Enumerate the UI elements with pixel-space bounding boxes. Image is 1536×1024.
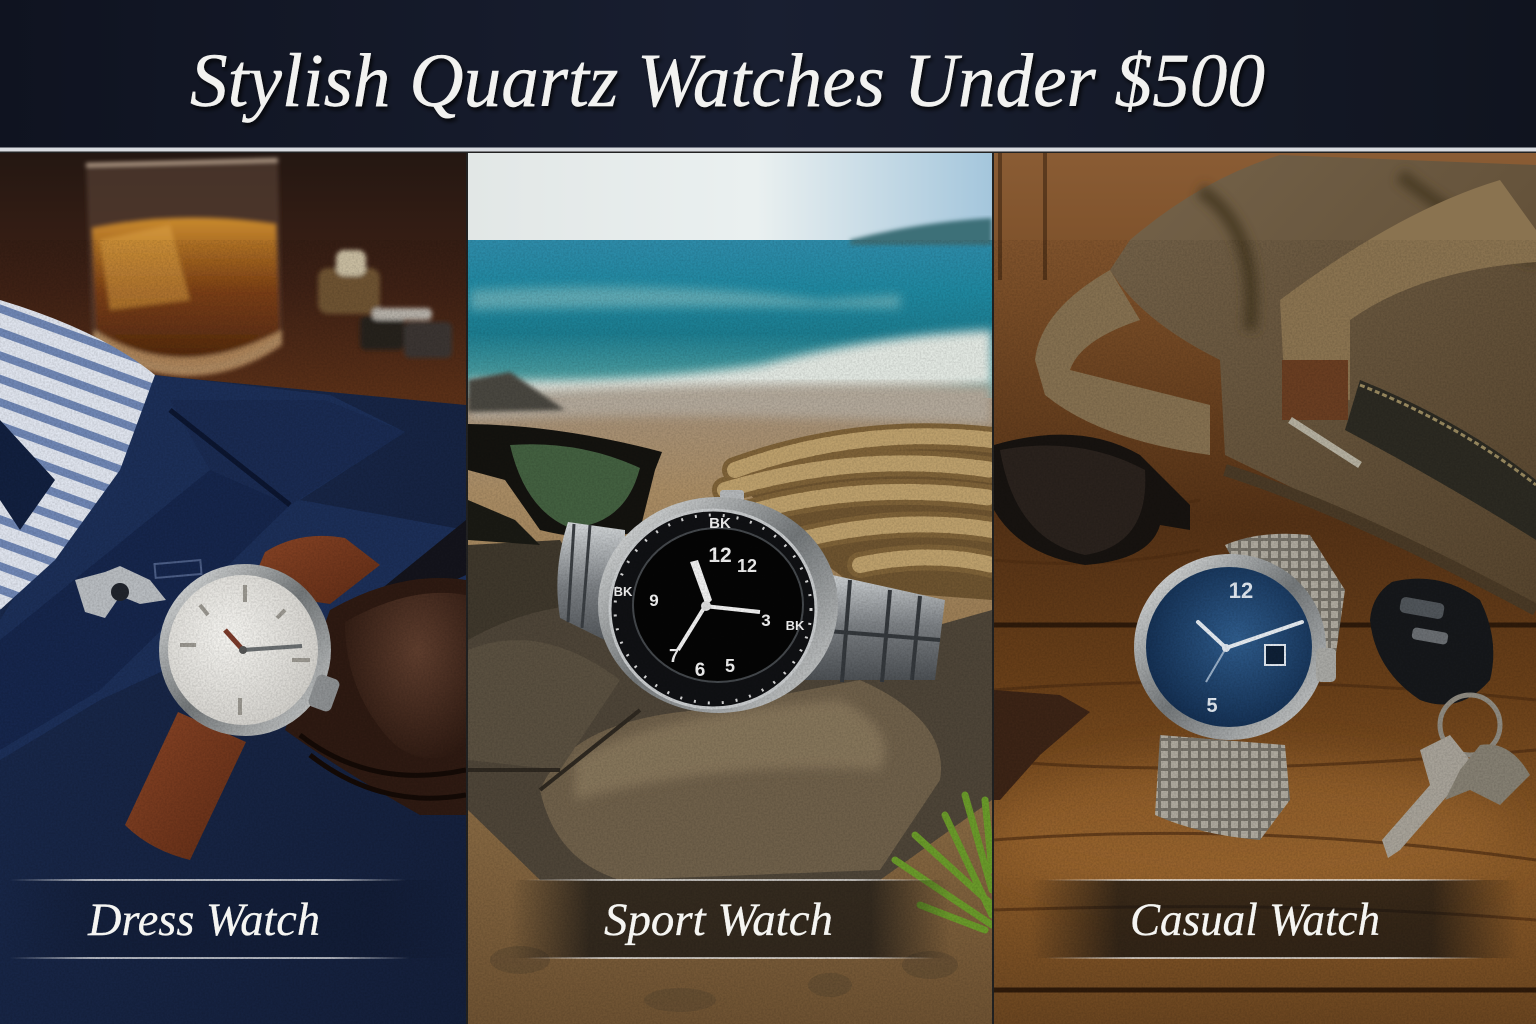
dial numerals: 12 [737,556,757,576]
striped shirt collar [0,300,155,610]
dial numerals: 6 [695,660,705,681]
band: sport [510,880,950,958]
dial numerals: 3 [761,611,771,630]
dial numerals: BK [786,618,805,633]
dial marks: 12 [1229,578,1253,603]
label: sport watch: Sport Watch [604,894,833,946]
surf foam [468,287,992,401]
sky [468,153,992,248]
dial numerals: 7 [669,646,679,666]
casual watch [1134,534,1345,840]
sea [468,240,992,410]
hands [690,560,712,606]
dress watch [125,536,380,860]
case [598,497,838,713]
title: Stylish Quartz Watches Under $500 [190,39,1265,123]
case [1134,554,1326,740]
panel: dress watch [0,153,466,1024]
dial marks: 5 [1206,695,1218,717]
panel: sport watch [468,153,992,1024]
bezel [610,510,816,708]
keys [1382,695,1530,858]
divider [10,879,406,881]
dial numerals [614,515,805,681]
divider [525,879,935,881]
leather wallet [285,520,466,815]
dial numerals: BK [709,515,731,532]
divider [1045,879,1485,881]
sand [468,398,992,1024]
band: dress [82,881,268,957]
photo grain overlay [0,240,1536,1024]
wooden table [994,153,1536,1024]
distant rock [468,372,565,412]
dial numerals: 9 [649,591,659,610]
band: casual [1030,880,1520,958]
rock [468,605,992,880]
hands [1198,622,1302,648]
dial numerals: 5 [725,656,735,676]
mesh strap [1225,534,1345,660]
strap [248,536,380,604]
dial [168,575,318,725]
sport watch [557,490,945,713]
sunglasses [468,424,662,545]
bark piece [994,690,1090,800]
whisky glass [86,160,282,376]
canvas bag [1035,155,1536,610]
header banner [0,0,1536,152]
wood glow [990,760,1510,900]
crown [720,490,744,500]
jacket lapel [0,375,466,760]
navy jacket [0,377,466,1024]
dial [1146,567,1312,727]
dark ground under sunglasses [468,540,562,640]
label: dress watch: Dress Watch [87,894,320,946]
plant [895,795,992,930]
coiled rope [725,436,992,600]
bracelet right [804,575,945,680]
key fob [1370,579,1493,704]
panel: casual watch [990,153,1536,1024]
bracelet left [557,522,625,650]
case [159,564,331,736]
sunglasses [994,435,1190,565]
blurred cufflinks on table [318,250,452,358]
cufflink [75,566,166,618]
dial numerals: 12 [708,544,732,567]
label: casual watch: Casual Watch [1130,894,1380,946]
dial numerals: BK [614,584,633,599]
pebbles [490,946,958,1012]
dial marks [1206,578,1253,717]
distant headland [850,218,992,245]
wooden table background [0,153,466,405]
wood planks [994,153,1536,990]
